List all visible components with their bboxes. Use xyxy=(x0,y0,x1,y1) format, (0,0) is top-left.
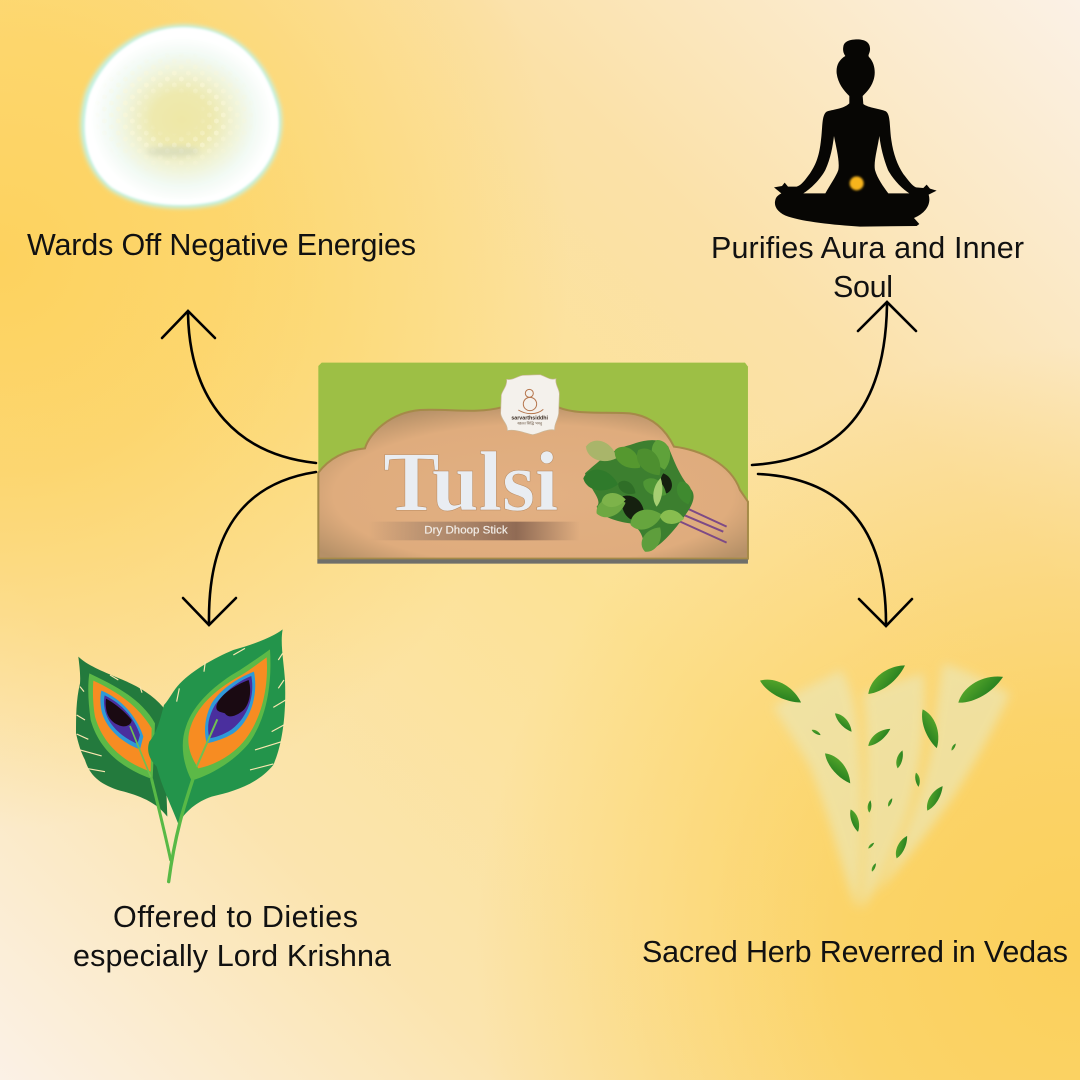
icon: meditating silhouette xyxy=(774,39,937,227)
right eye xyxy=(183,649,270,781)
product box: tulsi dry dhoop stick xyxy=(317,363,748,564)
arrow: to sacred herb xyxy=(758,474,912,626)
panel: purifies aura and inner soul xyxy=(711,39,1024,304)
panel: offered to deities xyxy=(73,629,391,973)
box bottom edge xyxy=(317,559,748,564)
tan scalloped panel xyxy=(318,407,748,559)
stems xyxy=(152,779,193,882)
banner: dry dhoop stick: Dry Dhoop Stick xyxy=(424,525,508,537)
label: sacred herb reverred in vedas: Sacred Herb Reverred in Vedas xyxy=(642,935,1068,969)
logo label: sarvarthsiddhi xyxy=(511,415,548,421)
arrow: to offered to deities xyxy=(183,472,316,625)
label continuation: Soul xyxy=(833,270,893,304)
arrow: to wards off negative energies xyxy=(162,311,316,463)
logo label xyxy=(501,375,559,435)
icon: peacock feathers xyxy=(76,629,286,882)
banner: dry dhoop stick xyxy=(368,522,580,540)
product name: Tulsi: Tulsi xyxy=(383,435,558,529)
panel: sacred herb xyxy=(642,659,1068,969)
label: offered to deities: Offered to Dieties xyxy=(113,900,358,934)
label: wards off negative energies: Wards Off Negative Energies xyxy=(27,228,416,262)
wind streaks xyxy=(773,663,1010,910)
label: purifies aura and inner soul: Purifies Aura and Inner xyxy=(711,231,1024,265)
logo label: वहतत सिद्धि भवतु xyxy=(517,421,543,426)
herb bunch xyxy=(582,437,727,556)
falling leaves xyxy=(757,659,1006,872)
right feather xyxy=(148,629,286,824)
icon: energy bubble xyxy=(80,25,282,208)
left feather xyxy=(76,657,167,817)
panel: wards off negative energies xyxy=(27,25,416,262)
label continuation: especially Lord Krishna xyxy=(73,939,391,973)
icon: flying leaves in wind streaks xyxy=(757,659,1010,910)
box green lid xyxy=(318,363,748,559)
arrow: to purifies aura xyxy=(752,302,916,465)
left eye xyxy=(88,673,155,779)
